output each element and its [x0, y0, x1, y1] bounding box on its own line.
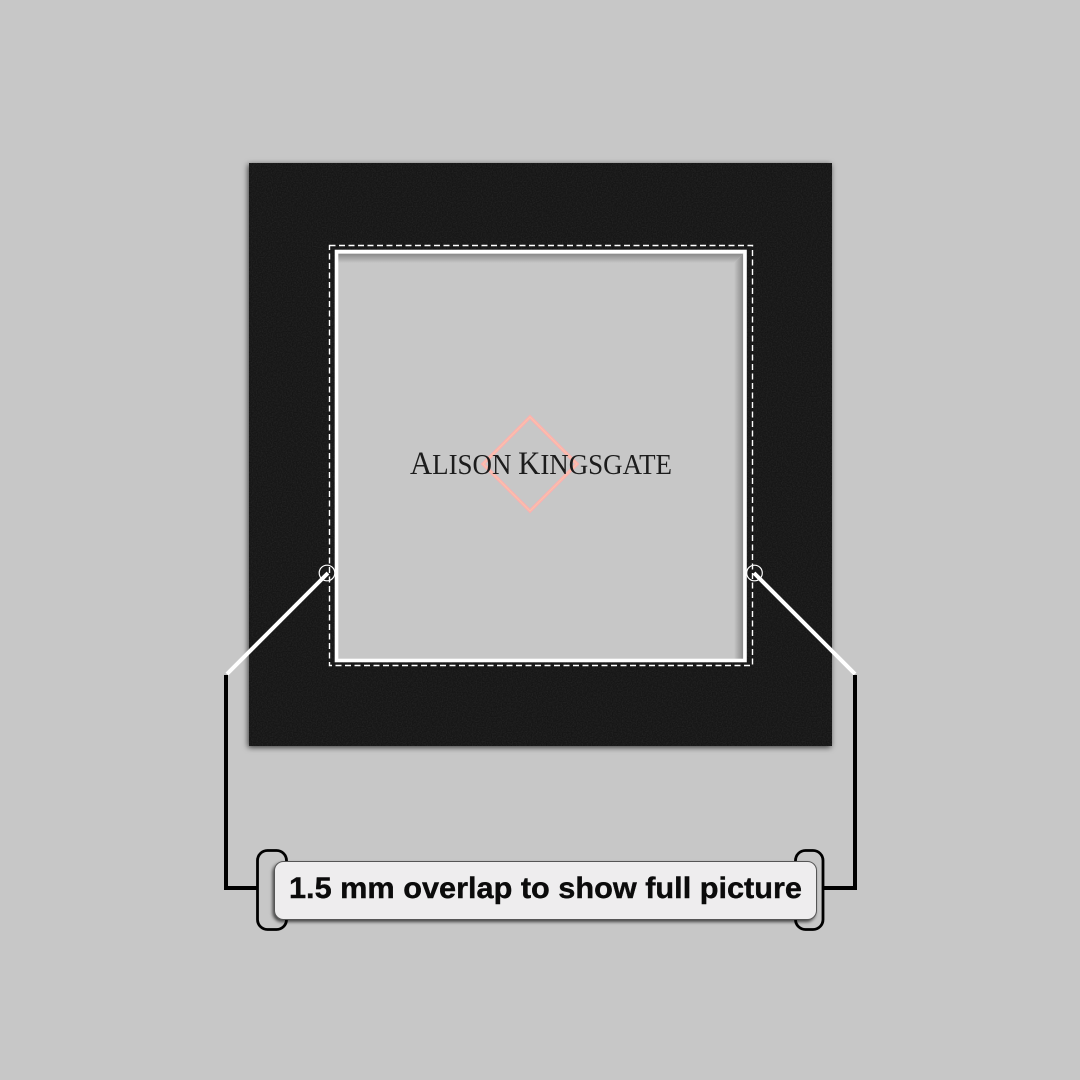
- right black connector: [823, 675, 855, 888]
- picture window with inner bevel: [336, 252, 745, 661]
- right bracket tab: [796, 850, 823, 930]
- arrow: left white leader line: [227, 565, 335, 674]
- marker: right overlap circle: [747, 565, 762, 581]
- logo wordmark: ALISON KINGSGATE: [410, 446, 672, 482]
- logo: Alison Kingsgate: [410, 417, 672, 511]
- callout text: 1.5 mm overlap to show full picture: [289, 872, 802, 905]
- left bracket tab: [258, 850, 286, 930]
- logo diamond: [483, 417, 577, 511]
- left black connector: [226, 675, 257, 888]
- callout label: [274, 862, 816, 920]
- panel: black mount frame: [249, 163, 832, 746]
- arrow: right white leader line: [747, 565, 855, 674]
- dashed overlap outline: [330, 246, 752, 666]
- marker: left overlap circle: [319, 565, 335, 581]
